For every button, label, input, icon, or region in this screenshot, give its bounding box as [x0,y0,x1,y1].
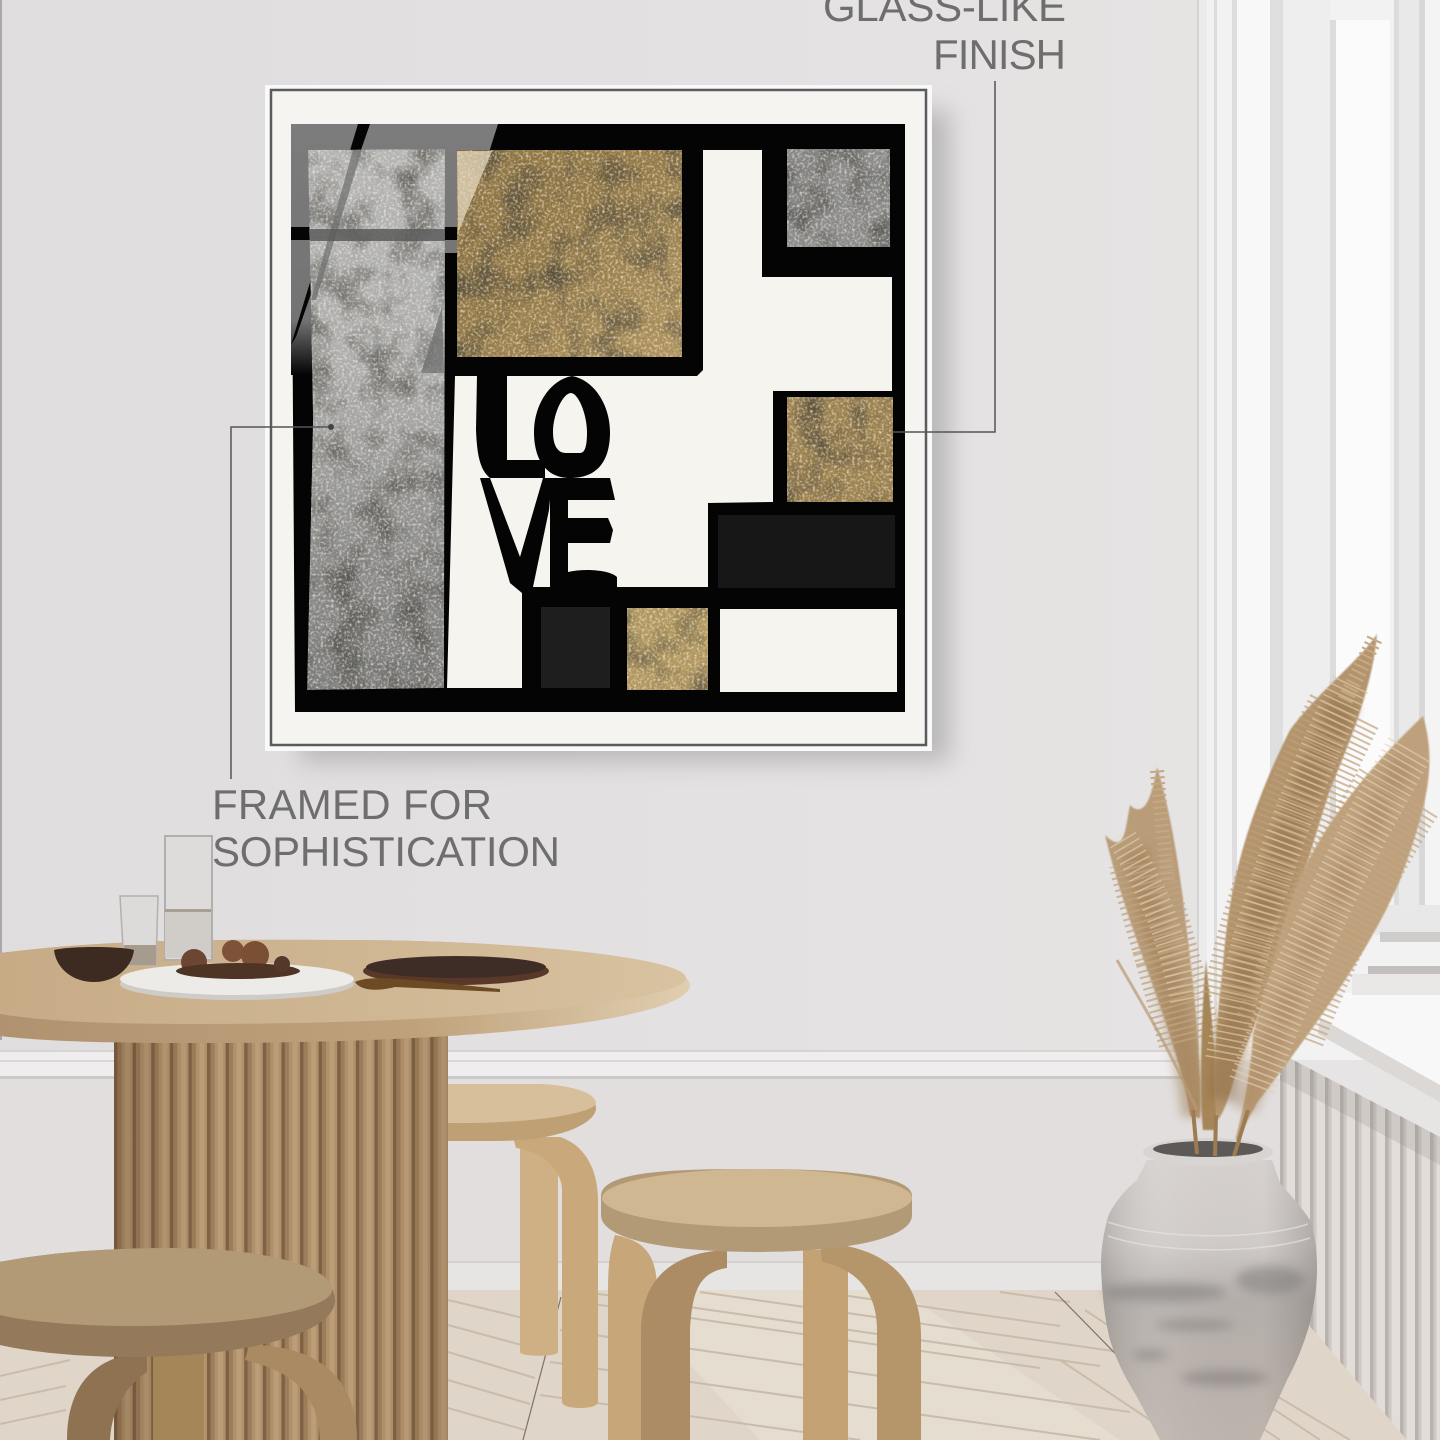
gold small panel [627,608,708,690]
reflection across silver panel [310,150,445,373]
letter O [534,376,610,478]
vase rim [1143,1138,1273,1166]
pampas grass [1105,634,1429,1150]
label: framed for sophistication: FRAMED FOR [212,781,492,828]
fluted pedestal [114,1030,448,1440]
marble board [120,963,354,1000]
leader line: glass-like finish [893,81,995,432]
letter V [480,478,552,593]
label: framed for sophistication: SOPHISTICATION [212,828,560,875]
vase ridges [1108,1222,1310,1250]
callout: glass-like finish [823,0,1066,432]
label: glass-like finish [823,0,1066,78]
ceramic vase [1101,1110,1317,1440]
weathering smudges [1103,1266,1304,1386]
white lower right panel [720,609,897,692]
dining table [0,940,690,1440]
letter E [550,478,617,590]
wooden plate [363,956,549,985]
dark bowl [54,947,134,982]
silver tall panel [307,149,445,690]
table top edge [0,940,690,1043]
glass carafe [165,836,212,960]
table top surface [0,940,686,1024]
vase body [1101,1160,1317,1440]
black tone panel [718,515,895,588]
front centre stool [601,1169,921,1440]
silver small panel [787,149,890,247]
leader line: framed for sophistication [231,424,334,779]
framed artwork [265,85,932,751]
stems in vase mouth [1193,1110,1248,1156]
vase mouth [1153,1141,1263,1157]
frame [265,85,932,751]
canvas with frame line [271,90,926,745]
white canvas field [447,150,892,688]
left edge sliver [0,0,2,1040]
stacked books [1352,932,1440,995]
glass reflection: grey wash over black [291,124,498,375]
right plume [1233,716,1429,1150]
table setting [54,836,549,1000]
left plume [1105,767,1200,1118]
floor [0,1290,1440,1440]
vase shading [1101,1160,1317,1440]
drinking glass [120,896,158,965]
gold large panel [457,150,682,357]
black painted structure [291,124,905,712]
letter L [476,375,545,478]
gold reflection highlight [457,151,492,233]
artwork shadow [300,110,950,762]
middle plume [1214,634,1377,1120]
window frame and casing [1197,0,1440,1102]
radiator [1280,1053,1440,1440]
front left stool [0,1248,357,1440]
gold right panel [787,397,893,502]
rear stool [448,1084,598,1408]
label: framed for sophistication [212,781,560,875]
callout: framed for sophistication [212,424,560,875]
dark small panel [541,607,610,688]
chocolates [176,940,300,979]
short centre plume [1201,960,1217,1130]
wainscot rail and skirting [0,1050,1290,1290]
spoon [355,978,500,992]
label: glass-like finish: FINISH [933,31,1066,78]
LOVE painted letters [476,375,617,593]
